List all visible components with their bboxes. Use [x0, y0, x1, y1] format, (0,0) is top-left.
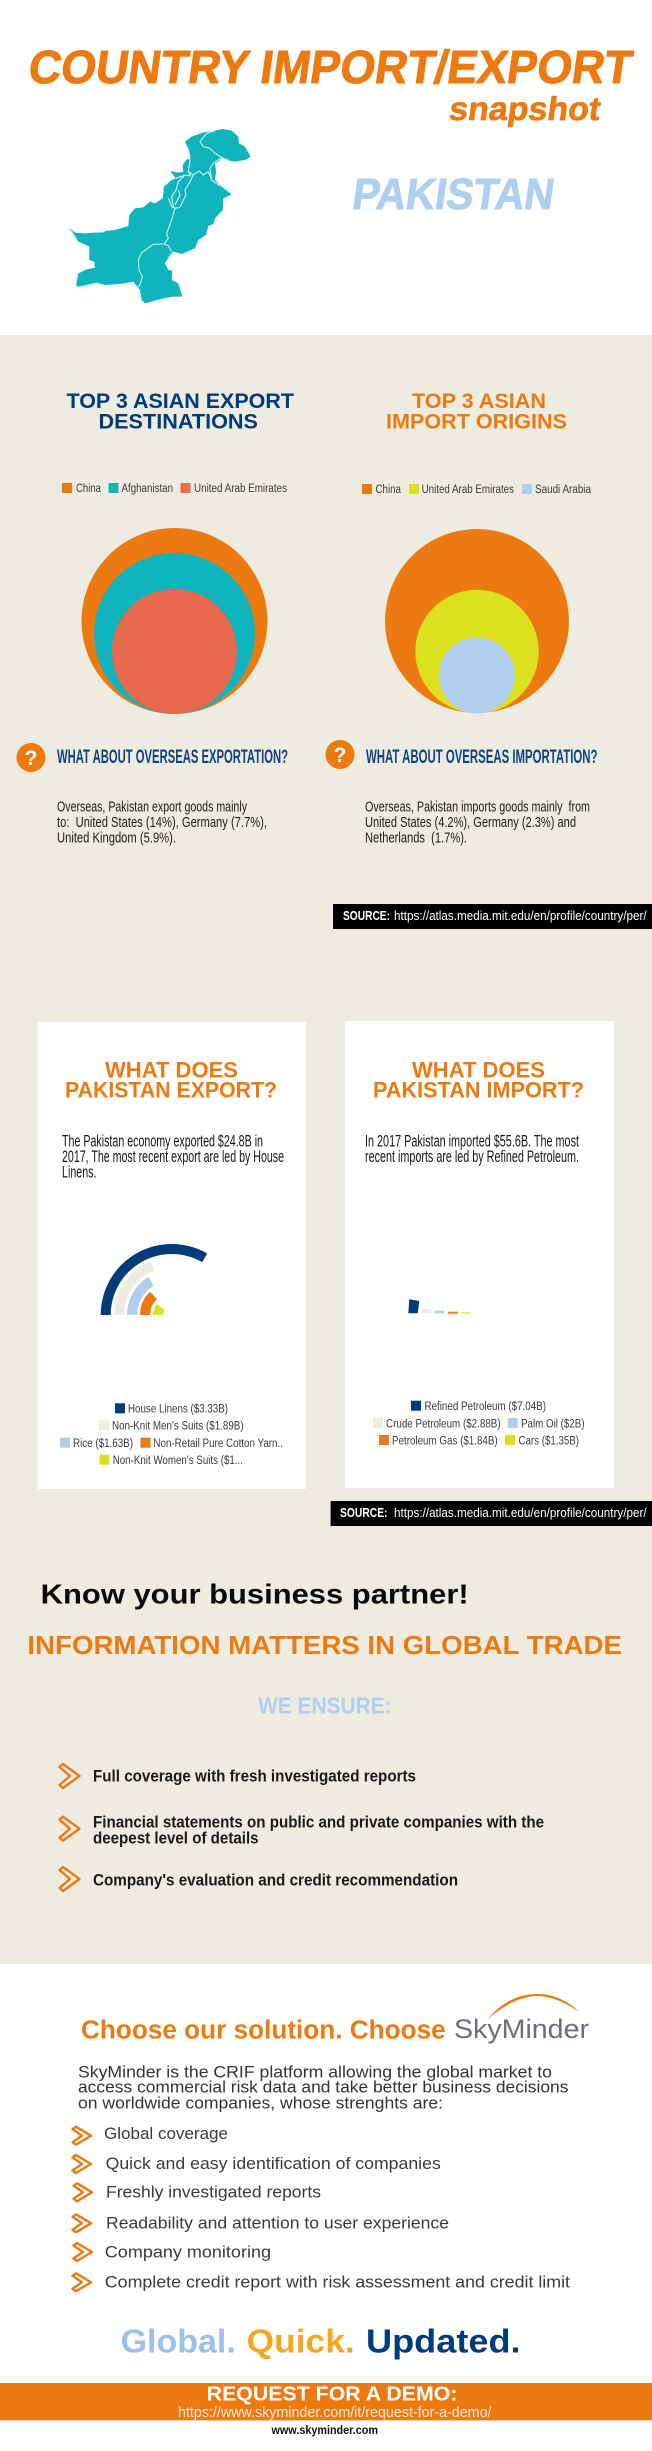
legend: export destinations: Afghanistan [122, 483, 173, 495]
text: overseas exportation [57, 800, 267, 847]
heading: export destinations: TOP 3 ASIAN EXPORT [66, 390, 294, 413]
source bar: trade partners [333, 904, 652, 929]
text: export summary: The Pakistan economy exported $24.8B in [62, 1133, 263, 1151]
title: COUNTRY IMPORT/EXPORT [26, 41, 636, 93]
legend: exports: House Linens ($3.33B) [128, 1404, 228, 1416]
icon: question mark, imports [326, 740, 354, 769]
heading: exports: PAKISTAN EXPORT? [65, 1078, 277, 1102]
tagline [121, 2322, 521, 2359]
icon: question mark, exports [16, 743, 46, 772]
strength: monitoring: Company monitoring [105, 2242, 271, 2261]
text: overseas exportation: United Kingdom (5.9%). [57, 831, 176, 847]
text: overseas importation: Netherlands (1.7%). [365, 831, 467, 847]
panel: top Asian export destinations [16, 390, 294, 847]
logo: SkyMinder [454, 1994, 589, 2044]
icon: chevron 2 [60, 1817, 80, 1841]
legend: export destinations: United Arab Emirates [194, 483, 287, 495]
icon: chevron reports [74, 2183, 92, 2201]
strength: reports: Freshly investigated reports [106, 2183, 321, 2202]
heading: information matters: INFORMATION MATTERS IN GLOBAL TRADE [27, 1630, 622, 1660]
text: overseas importation [365, 800, 590, 847]
icon: chevron credit report [72, 2273, 91, 2291]
section: know your business partner [27, 1578, 622, 1891]
list item: evaluation: Company's evaluation and credit recommendation [93, 1872, 458, 1890]
legend: export destinations [62, 483, 287, 495]
logo: SkyMinder: SkyMinder [454, 2014, 589, 2044]
website footer: www.skyminder.com [271, 2425, 378, 2437]
radial bar chart: imports [408, 1299, 471, 1314]
country name: PAKISTAN [350, 170, 557, 219]
nested circle chart: export destinations [82, 528, 268, 714]
icon: question mark, exports: ? [25, 747, 37, 770]
icon: question mark, imports: ? [334, 744, 346, 767]
heading: choose our solution: Choose our solution. Choose [81, 2016, 446, 2044]
legend: imports: Petroleum Gas ($1.84B) [392, 1435, 498, 1447]
icon: chevron global coverage [72, 2127, 91, 2145]
list item: financial statements: deepest level of details [93, 1829, 259, 1847]
legend: import origins: Saudi Arabia [535, 484, 592, 496]
legend: import origins: United Arab Emirates [422, 484, 514, 496]
legend: exports [60, 1403, 283, 1467]
source bar: trade partners: SOURCE: [343, 909, 390, 923]
legend: exports: Non-Retail Pure Cotton Yarn.. [153, 1438, 283, 1450]
heading: imports [373, 1057, 584, 1102]
strength: global coverage: Global coverage [104, 2124, 228, 2143]
nested circle chart: import origins [385, 529, 569, 714]
section: SkyMinder solution [72, 1994, 589, 2359]
text: overseas importation: United States (4.2%), Germany (2.3%) and [365, 815, 576, 831]
heading: import origins: IMPORT ORIGINS [386, 410, 567, 434]
radial bar chart: exports [101, 1244, 207, 1315]
strength: credit report: Complete credit report with risk assessment and credit limit [105, 2273, 570, 2292]
list item: financial statements [93, 1813, 544, 1847]
text: SkyMinder description [78, 2062, 568, 2112]
strength: readability: Readability and attention to user experience [106, 2214, 449, 2233]
tagline: Updated. [366, 2322, 521, 2359]
source bar: products [331, 1501, 652, 1526]
legend: imports: Cars ($1.35B) [518, 1435, 579, 1447]
heading: exports: WHAT DOES [105, 1057, 238, 1082]
panel: what Pakistan exports [37, 1022, 306, 1489]
legend: imports [373, 1401, 585, 1447]
text: SkyMinder description: SkyMinder is the CRIF platform allowing the global market to [78, 2062, 552, 2081]
panel: top Asian import origins [326, 390, 598, 847]
icon: chevron 1 [60, 1764, 80, 1788]
icon: chevron readability [72, 2214, 91, 2232]
heading: exports [65, 1057, 277, 1102]
heading: imports: PAKISTAN IMPORT? [373, 1078, 584, 1102]
heading: export destinations: DESTINATIONS [98, 410, 258, 434]
header section [26, 41, 636, 303]
strength: identification: Quick and easy identification of companies [106, 2154, 441, 2173]
tagline: Quick. [247, 2322, 355, 2359]
tagline: Global. [121, 2322, 236, 2359]
heading: import origins [386, 390, 567, 434]
call to action banner: REQUEST FOR A DEMO: [207, 2383, 457, 2405]
legend: imports: Palm Oil ($2B) [521, 1418, 585, 1430]
text: SkyMinder description: access commercial risk data and take better business decisions [78, 2078, 568, 2097]
legend: export destinations: China [76, 483, 101, 495]
legend: imports: Crude Petroleum ($2.88B) [386, 1418, 501, 1430]
list item: coverage: Full coverage with fresh investigated reports [93, 1768, 416, 1786]
legend: imports: Refined Petroleum ($7.04B) [424, 1401, 546, 1413]
text: export summary: 2017, The most recent export are led by House [62, 1148, 284, 1166]
text: overseas exportation: Overseas, Pakistan export goods mainly [57, 800, 248, 816]
legend: exports: Rice ($1.63B) [73, 1438, 133, 1450]
heading: export destinations [66, 390, 294, 434]
legend: import origins: China [376, 484, 401, 496]
heading: overseas exportation: WHAT ABOUT OVERSEAS EXPORTATION? [57, 747, 288, 768]
beige background band [0, 335, 652, 1964]
panel: what Pakistan imports [345, 1021, 614, 1488]
text: import summary [365, 1133, 579, 1166]
text: export summary [62, 1133, 284, 1182]
legend: exports: Non-Knit Men's Suits ($1.89B) [112, 1420, 244, 1432]
icon: chevron monitoring [74, 2243, 92, 2261]
icon: chevron identification [72, 2155, 91, 2173]
text: overseas exportation: to: United States (14%), Germany (7.7%), [57, 815, 267, 831]
heading: we ensure: WE ENSURE: [258, 1692, 392, 1718]
heading: know your business partner: Know your business partner! [41, 1578, 469, 1609]
legend: import origins [362, 484, 592, 496]
call to action banner [0, 2383, 652, 2421]
text: export summary: Linens. [62, 1164, 96, 1182]
heading: import origins: TOP 3 ASIAN [412, 390, 546, 413]
text: SkyMinder description: on worldwide companies, whose strenghts are: [78, 2093, 443, 2112]
source bar: products: SOURCE: [340, 1506, 388, 1520]
map of Pakistan [68, 129, 251, 303]
heading: imports: WHAT DOES [412, 1057, 545, 1082]
subtitle: snapshot: snapshot [447, 91, 603, 128]
legend: exports: Non-Knit Women's Suits ($1... [113, 1455, 243, 1467]
list item: financial statements: Financial statements on public and private companies with the [93, 1813, 544, 1831]
icon: chevron 3 [60, 1867, 80, 1891]
call to action banner: https://www.skyminder.com/it/request-for-a-demo/ [178, 2405, 492, 2421]
